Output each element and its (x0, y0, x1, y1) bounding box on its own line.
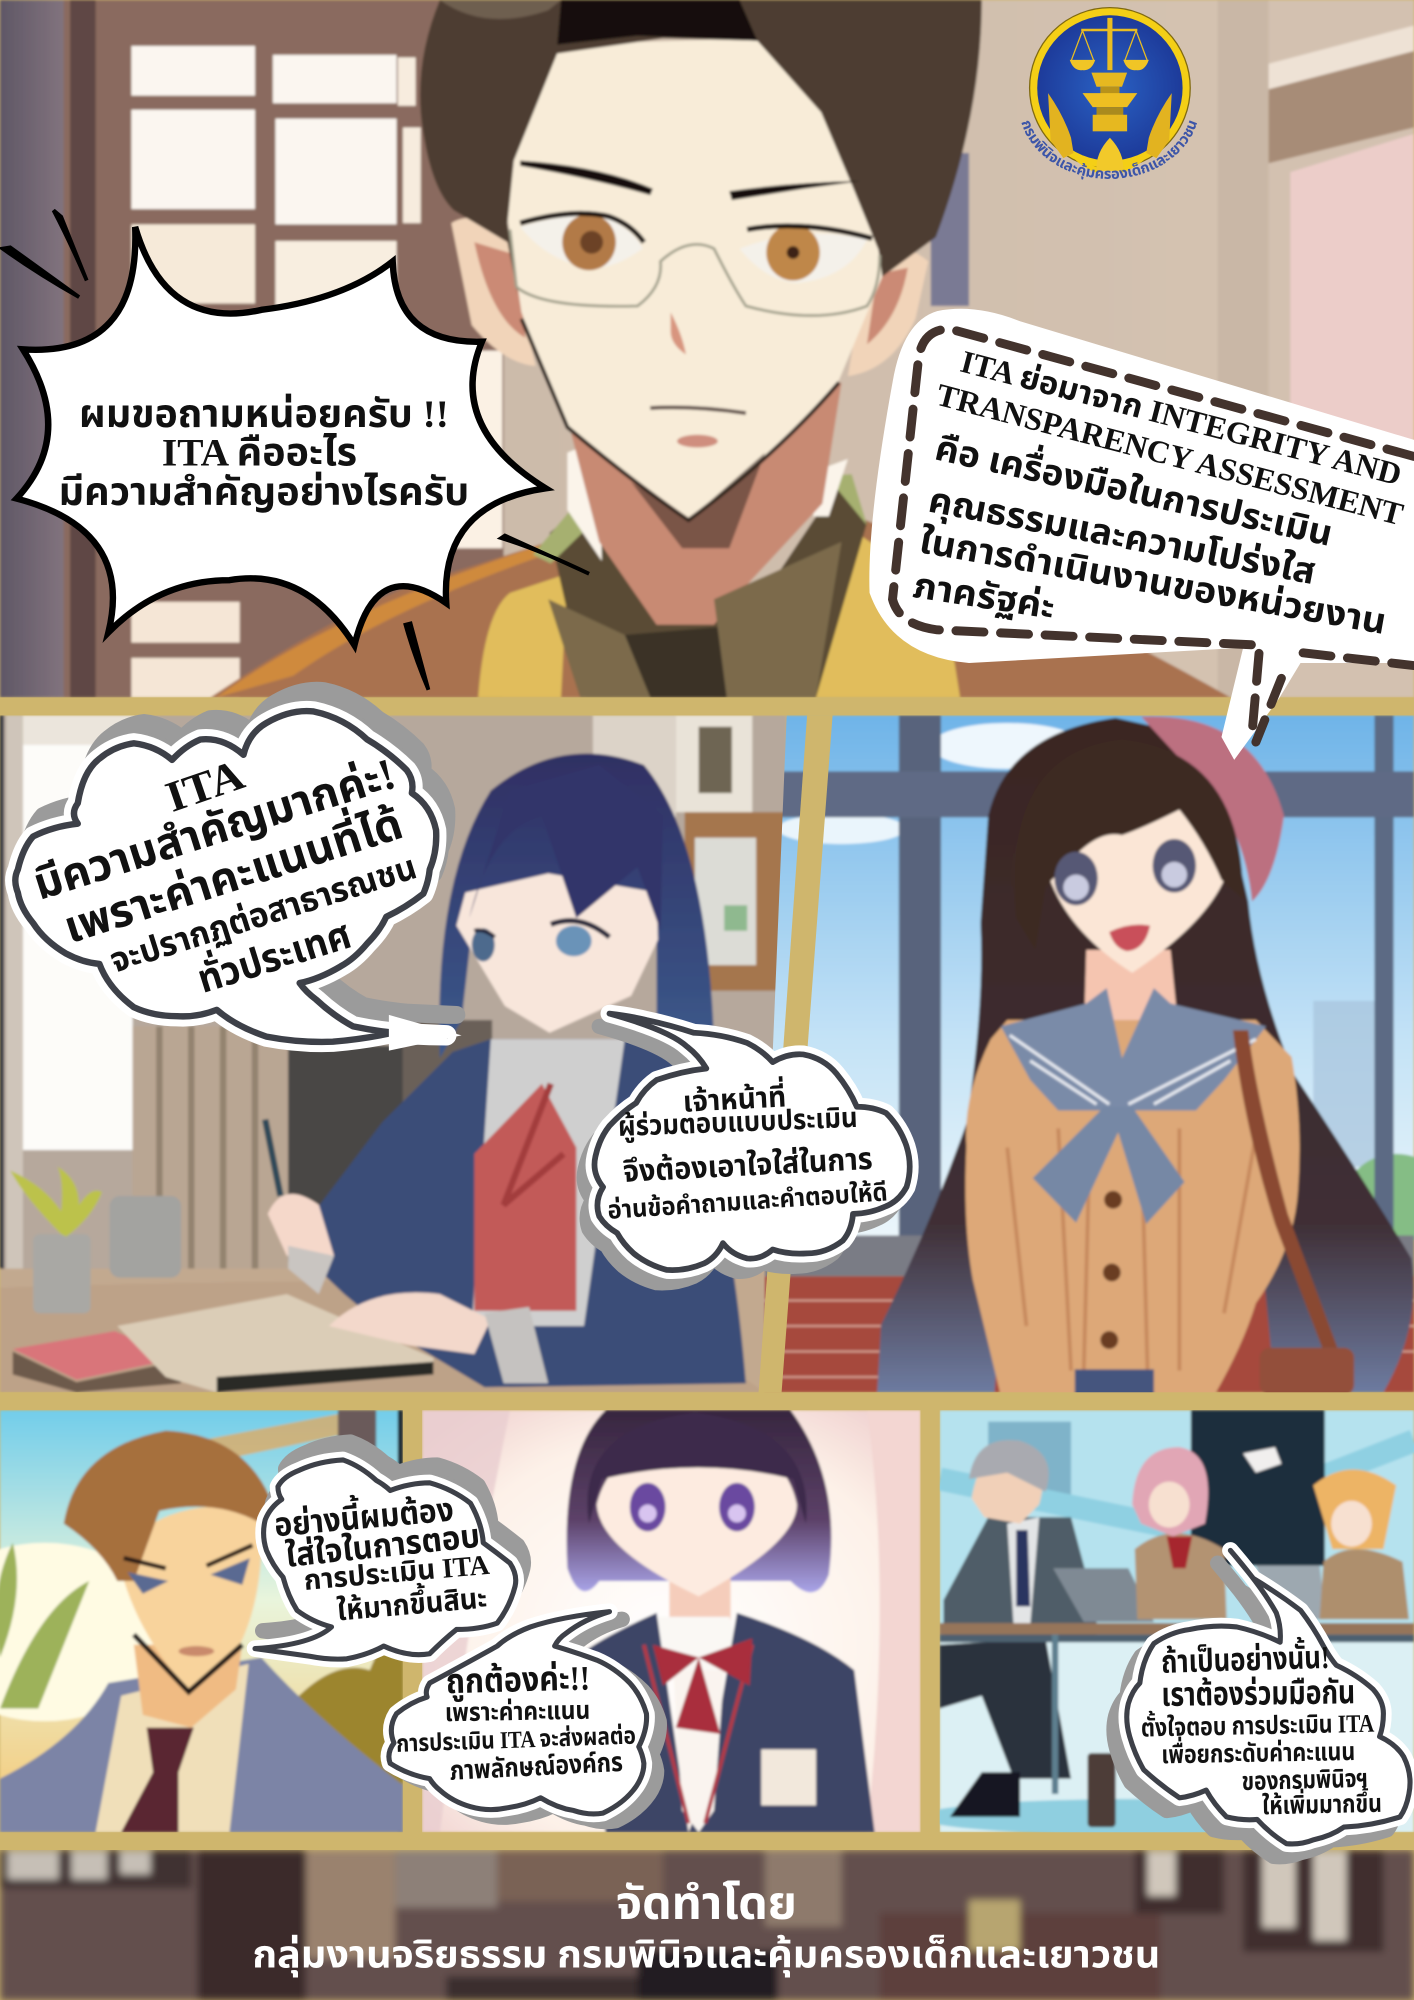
panel: man with glasses asking about ITA (0, 0, 1414, 697)
nose and mouth (671, 312, 686, 354)
sweater hem and skirt (1075, 1369, 1154, 1395)
definition text: ในการดำเนินงานของหน่วยงาน (917, 521, 1389, 642)
footer credit text (252, 1878, 1160, 1977)
logo circular caption: กรมพินิจและคุ้มครองเด็กและเยาวชน (1022, 120, 1197, 180)
panel: girl in pink beret by the window (765, 715, 1414, 1396)
hair (567, 1410, 831, 1592)
glasses (510, 230, 880, 316)
correct text (396, 1659, 636, 1786)
panel: young man in suit (0, 1410, 403, 1832)
importance text: มีความสำคัญมากค่ะ! (27, 748, 401, 910)
neck and face (134, 1645, 242, 1728)
importance text: ทั่วประเทศ (191, 908, 356, 1002)
cloud speech bubble: man pledges to respond (255, 1442, 523, 1659)
collar (550, 478, 867, 697)
staff text (607, 1075, 888, 1225)
footer credit text: กลุ่มงานจริยธรรม กรมพินิจและคุ้มครองเด็กและเยาวชน (252, 1933, 1160, 1977)
hair (64, 1431, 270, 1581)
bangs (1040, 755, 1244, 883)
together text (1141, 1635, 1382, 1820)
dashed speech bubble: ITA definition (869, 309, 1414, 760)
bubble shadow (26, 691, 456, 1022)
logo: Department of Juvenile Observation and Protection emblem (1022, 7, 1197, 180)
impact lines (3, 210, 589, 690)
jacket (576, 1613, 875, 1832)
man text: อย่างนี้ผมต้อง (272, 1485, 455, 1544)
definition text: TRANSPARENCY ASSESSMENT (933, 377, 1407, 532)
panel: woman in navy blazer at desk (0, 715, 787, 1392)
neck and collar (669, 1562, 731, 1626)
cloud speech bubble: scores affect image (389, 1612, 659, 1822)
footer credit text: จัดทำโดย (616, 1878, 797, 1929)
jacket (291, 1039, 746, 1387)
bag (1088, 1753, 1116, 1827)
correct text: เพราะค่าคะแนน (445, 1696, 590, 1727)
buttons (1104, 1191, 1122, 1209)
cloud speech bubble: ITA is important (15, 691, 462, 1051)
together text: ของกรมพินิจฯ (1241, 1764, 1368, 1796)
bow (653, 1638, 752, 1734)
staff text: จึงต้องเอาใจใส่ในการ (622, 1142, 873, 1189)
face (507, 38, 882, 518)
man text: การประเมิน ITA (303, 1550, 492, 1597)
together text: ถ้าเป็นอย่างนั้น! (1161, 1635, 1330, 1680)
importance text (27, 748, 421, 1002)
seated woman right (1320, 1549, 1409, 1619)
shirt (96, 1664, 249, 1832)
shirt and blouse (472, 1039, 625, 1326)
panel: footer credit background (0, 1850, 1414, 2000)
correct text: ภาพลักษณ์องค์กร (449, 1747, 624, 1786)
staff text: อ่านข้อคำถามและคำตอบให้ดี (607, 1177, 888, 1225)
correct text: การประเมิน ITA จะส่งผลต่อ (396, 1722, 636, 1758)
cloud speech bubble: staff must pay attention (584, 1014, 910, 1283)
books (14, 1330, 152, 1380)
bow (1033, 1107, 1184, 1224)
eyes (1054, 852, 1098, 905)
together text: ให้เพิ่มมากขึ้น (1262, 1785, 1382, 1820)
importance text: จะปรากฏต่อสาธารณชน (106, 848, 421, 980)
spiky speech bubble: question: มีความสำคัญอย่างไรครับ (59, 470, 469, 514)
face (456, 873, 658, 1033)
spiky speech bubble: question (3, 210, 589, 690)
sailor collar (1001, 988, 1266, 1111)
jacket (210, 542, 612, 697)
bag (1260, 1348, 1354, 1395)
beret (1141, 716, 1284, 901)
seated man (944, 1517, 1097, 1638)
face (1048, 808, 1226, 974)
correct text: ถูกต้องค่ะ!! (445, 1659, 591, 1702)
tie (625, 626, 727, 698)
ID card (761, 1749, 816, 1805)
definition text: คือ เครื่องมือในการประเมิน (932, 422, 1337, 554)
laptop (1053, 1568, 1154, 1622)
gold diagonal divider (759, 715, 833, 1392)
panel: girl with bob hair and red bow (422, 1410, 921, 1832)
hair (420, 0, 982, 296)
panel: office team at laptops (918, 1410, 1414, 1835)
definition text (910, 344, 1407, 642)
suit (0, 1658, 403, 1832)
standing supervisor (1191, 1410, 1325, 1566)
ears (451, 218, 536, 366)
staff text: ผู้ร่วมตอบแบบประเมิน (617, 1102, 858, 1144)
staff text: เจ้าหน้าที่ (682, 1075, 787, 1119)
neck (1082, 948, 1178, 1022)
plant and cup (33, 1234, 91, 1313)
man text (272, 1485, 492, 1628)
definition text: ภาครัฐค่ะ (910, 565, 1058, 627)
man text: ให้มากขึ้นสินะ (335, 1577, 488, 1628)
cloud speech bubble: work together (1114, 1550, 1410, 1857)
tie (121, 1728, 194, 1832)
brows (520, 161, 653, 195)
spiky speech bubble: question: ITA คืออะไร (162, 430, 357, 474)
hair (439, 754, 714, 1058)
face (597, 1438, 797, 1596)
seated woman (1135, 1533, 1227, 1619)
long hair (877, 718, 1414, 1392)
definition text: คุณธรรมและความโปร่งใส (925, 480, 1319, 593)
together text: เพื่อยกระดับค่าคะแนน (1161, 1733, 1355, 1769)
desk (940, 1623, 1414, 1635)
importance text: ITA (160, 751, 250, 822)
together text: เราต้องร่วมมือกัน (1161, 1674, 1355, 1714)
bubble text: ผมขอถามหน่อยครับ !! (79, 392, 449, 436)
laptop right (1256, 1566, 1326, 1619)
man text: ใส่ใจในการตอบ (284, 1518, 482, 1575)
together text: ตั้งใจตอบ การประเมิน ITA (1141, 1706, 1375, 1743)
importance text: เพราะค่าคะแนนที่ได้ (56, 792, 408, 953)
neck (571, 383, 842, 625)
definition text: ITA ย่อมาจาก INTEGRITY AND (957, 344, 1405, 492)
eyes (128, 1572, 168, 1594)
hands and pen (268, 1194, 334, 1256)
strap (1233, 1030, 1337, 1348)
eyes (520, 216, 643, 268)
cardigan (965, 1020, 1300, 1396)
